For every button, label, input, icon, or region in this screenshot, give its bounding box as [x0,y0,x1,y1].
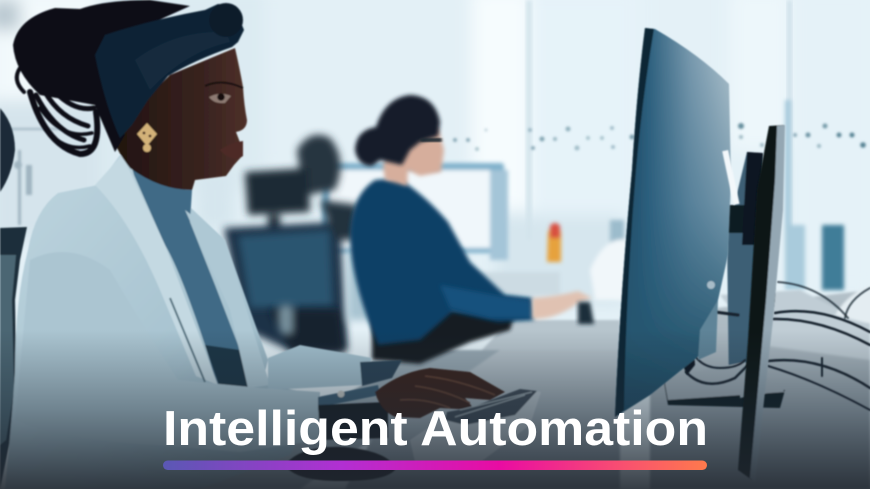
bottom dark gradient overlay [0,330,870,489]
eye [209,94,231,103]
sleeve forearm back [268,345,372,390]
collar shadow line [170,298,205,382]
title: Intelligent Automation [163,402,708,456]
iris [217,93,225,101]
far background equipment [470,100,844,300]
back office chair [224,135,358,355]
jacket body [5,155,320,489]
keyboard [410,389,541,470]
braid loops [17,68,97,154]
chair seat and frame [270,250,376,352]
monitor screw [707,281,715,289]
colleague mouse [578,302,594,324]
desk cables [686,282,870,410]
mouse [285,447,395,481]
seated colleague [350,95,592,364]
jacket collar [95,155,218,385]
front thin monitor [722,125,785,482]
neck shadow [205,345,248,388]
monitor lower neck [698,300,718,360]
colleague neck and face [383,128,444,186]
back monitor [322,163,508,260]
chair mesh back [238,230,333,308]
lips [220,141,243,159]
hands [375,368,505,418]
eyebrow [205,82,243,88]
colleague dark chair [372,300,514,364]
background desks [190,285,870,489]
monitor cable loop [672,320,695,375]
knuckle highlights [400,376,495,408]
colleague arm highlight [440,285,532,318]
left chair headrest [0,108,15,192]
turtleneck [132,168,240,385]
rear monitor and stand [664,152,785,408]
monitor back panel [615,28,731,417]
shelf details [2,128,62,225]
headwrap [95,4,244,138]
right lapel [185,210,270,388]
earring [137,123,157,152]
main woman [0,0,541,489]
gradient underline [163,460,707,470]
face and neck [115,48,247,190]
monitor lower shade [615,28,731,417]
main monitor [615,28,731,417]
hair mass [13,0,190,152]
front sleeve [15,252,320,452]
monitor dark edge [615,28,654,417]
colleague body [350,178,534,345]
cuffs [318,360,402,440]
colleague hair [355,95,440,166]
left chair back [0,227,27,489]
chair mesh [0,255,16,445]
wrap highlight [135,32,230,90]
dotted pattern on glass [453,123,866,151]
colleague hand [532,291,592,319]
wrap knot [209,3,243,37]
colleague glasses [420,138,442,142]
